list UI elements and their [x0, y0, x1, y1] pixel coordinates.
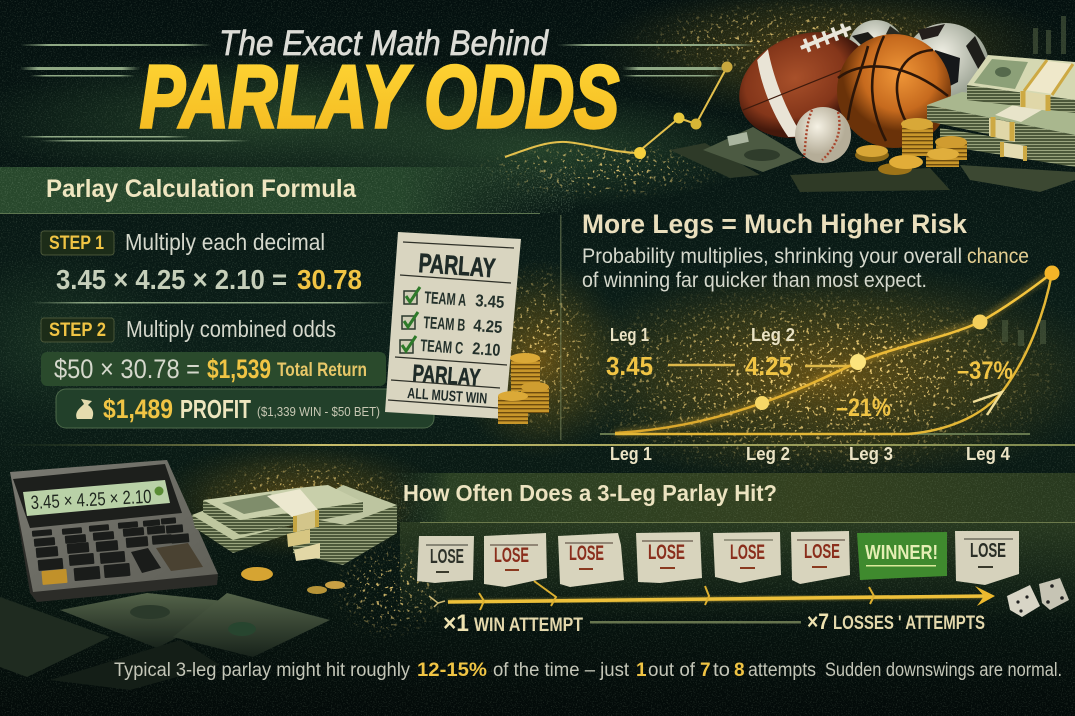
keypad: [32, 517, 203, 585]
ticket 4: LOSE: [648, 541, 685, 564]
total return box: [41, 352, 386, 386]
parlay betting slip: ALL MUST WIN: [407, 385, 488, 408]
percent drop labels: –21%: [836, 394, 891, 422]
profit box: PROFIT: [180, 394, 251, 424]
hero illustration: sports balls, cash, coins: [670, 13, 1075, 192]
ticket 7 winner: WINNER!: [865, 542, 938, 564]
total return box: $50 × 30.78 =: [54, 354, 200, 384]
ticket 1: LOSE: [430, 546, 464, 568]
section heading: Parlay Calculation Formula: [46, 175, 357, 203]
checklist: TEAM B: [423, 313, 466, 335]
title line 1: The Exact Math Behind: [219, 24, 549, 63]
middle stack: [927, 92, 1075, 153]
attempts labels: LOSSES ' ATTEMPTS: [833, 613, 985, 634]
footer note: 8: [734, 660, 745, 681]
risk chart: [600, 266, 1060, 464]
description: chance: [967, 245, 1029, 268]
panel: calculation formula: [0, 167, 575, 428]
title line 2: PARLAY ODDS: [140, 47, 619, 146]
attempts labels: ×1: [443, 610, 469, 637]
tickets row: [417, 531, 1019, 587]
ticket 6: LOSE: [804, 541, 840, 563]
bottom stack: [940, 128, 1075, 167]
checklist: 2.10: [472, 339, 501, 360]
risk curve glow: [615, 273, 1052, 433]
attempts labels: WIN ATTEMPT: [474, 615, 583, 636]
profit box: ($1,339 WIN - $50 BET): [257, 404, 380, 419]
ticket 8: LOSE: [970, 540, 1006, 562]
icon: slip coin stacks: [498, 353, 549, 424]
footer note: 12-15%: [417, 660, 487, 681]
total return box: $1,539: [207, 354, 271, 384]
section band: [395, 473, 1075, 523]
section band: [0, 167, 575, 214]
checklist: TEAM A: [424, 288, 467, 310]
icon: dice: [1007, 578, 1069, 617]
footer note: out of: [648, 660, 696, 681]
step 1: Multiply each decimal: [125, 229, 325, 255]
ticket 5: [713, 532, 781, 583]
step 2: [41, 316, 336, 342]
decimal odds row: [606, 325, 856, 381]
profit box: [56, 389, 434, 428]
footer note: 1: [636, 660, 647, 681]
floor bills: [670, 127, 1075, 192]
icon: gold coins on table: [241, 567, 345, 594]
decimal odds row: 4.25: [745, 351, 792, 381]
percent drop labels: –37%: [957, 357, 1013, 385]
icon: money bag: [76, 399, 93, 419]
step 2: STEP 2: [49, 320, 106, 341]
step 2: Multiply combined odds: [126, 316, 336, 342]
icon: basketball: [837, 34, 951, 148]
header rising line chart: [505, 62, 732, 159]
axis labels: [610, 444, 1010, 464]
axis labels: Leg 4: [966, 444, 1010, 464]
decimal odds row: Leg 1: [610, 325, 649, 345]
icon: calculator: 3.45 × 4.25 × 2.10: [30, 487, 152, 514]
checklist: [400, 287, 505, 360]
axis labels: Leg 1: [610, 444, 652, 464]
footer note: to: [713, 660, 730, 681]
decimal odds row: Leg 2: [751, 325, 795, 345]
description: [582, 245, 1029, 292]
parlay betting slip: [385, 232, 521, 419]
checklist: 3.45: [475, 291, 505, 312]
risk curve: [615, 273, 1052, 433]
description: of winning far quicker than most expect.: [582, 269, 927, 292]
footer note: 7: [700, 660, 711, 681]
step 1: STEP 1: [49, 233, 104, 254]
icon: baseball: [795, 107, 851, 163]
icon: soccer ball: [903, 23, 989, 109]
checklist: 4.25: [473, 316, 503, 337]
ticket 5: LOSE: [730, 541, 765, 564]
arrow head: [973, 392, 1002, 415]
total return box: Total Return: [277, 360, 367, 381]
ticket 3: LOSE: [569, 542, 604, 565]
ticket 2: LOSE: [494, 544, 529, 567]
panel: how often: [395, 473, 1075, 637]
attempts labels: ×7: [807, 609, 829, 634]
icon: football: [723, 13, 887, 157]
parlay betting slip: PARLAY: [418, 248, 496, 283]
decimal odds row: 3.45: [606, 351, 653, 381]
profit box: $1,489: [103, 394, 173, 424]
lower curve with arrow: [615, 273, 1052, 434]
footer note: Typical 3-leg parlay might hit roughly: [114, 660, 410, 681]
description: Probability multiplies, shrinking your overall: [582, 245, 962, 268]
ticket 8: [955, 531, 1019, 585]
icon: back soccer ball: [848, 20, 904, 76]
icon: calculator: [10, 460, 218, 602]
illustration: bills on table: [0, 593, 330, 690]
axis labels: Leg 3: [849, 444, 893, 464]
ticket 7 winner: [857, 532, 947, 580]
footer note: [114, 660, 1062, 681]
cash stacks: [927, 55, 1075, 167]
timeline arrow: [429, 581, 995, 610]
illustration: cash stack: [192, 485, 397, 565]
equation: 30.78: [297, 264, 362, 295]
checklist: TEAM C: [420, 336, 464, 358]
ticket 4: [636, 532, 702, 583]
axis labels: Leg 2: [746, 444, 790, 464]
gold coin stacks: [855, 118, 967, 175]
percent drop labels: [836, 357, 1013, 422]
equation: 3.45 × 4.25 × 2.10 =: [56, 264, 287, 295]
step 1: [41, 229, 325, 255]
parlay betting slip: PARLAY: [412, 360, 481, 392]
ticket 1: [417, 536, 474, 583]
title: [140, 24, 619, 146]
section heading: How Often Does a 3-Leg Parlay Hit?: [403, 480, 777, 506]
ticket 2: [484, 533, 547, 587]
ticket 3: [558, 533, 624, 587]
heading: More Legs = Much Higher Risk: [582, 209, 968, 239]
attempts labels: [443, 609, 985, 637]
top stack: [967, 55, 1075, 113]
ticket 6: [791, 531, 850, 584]
curve points: [755, 266, 1060, 410]
panel: more legs risk: [582, 209, 1060, 464]
footer note: of the time – just: [493, 660, 630, 681]
footer note: attempts: [748, 660, 816, 681]
